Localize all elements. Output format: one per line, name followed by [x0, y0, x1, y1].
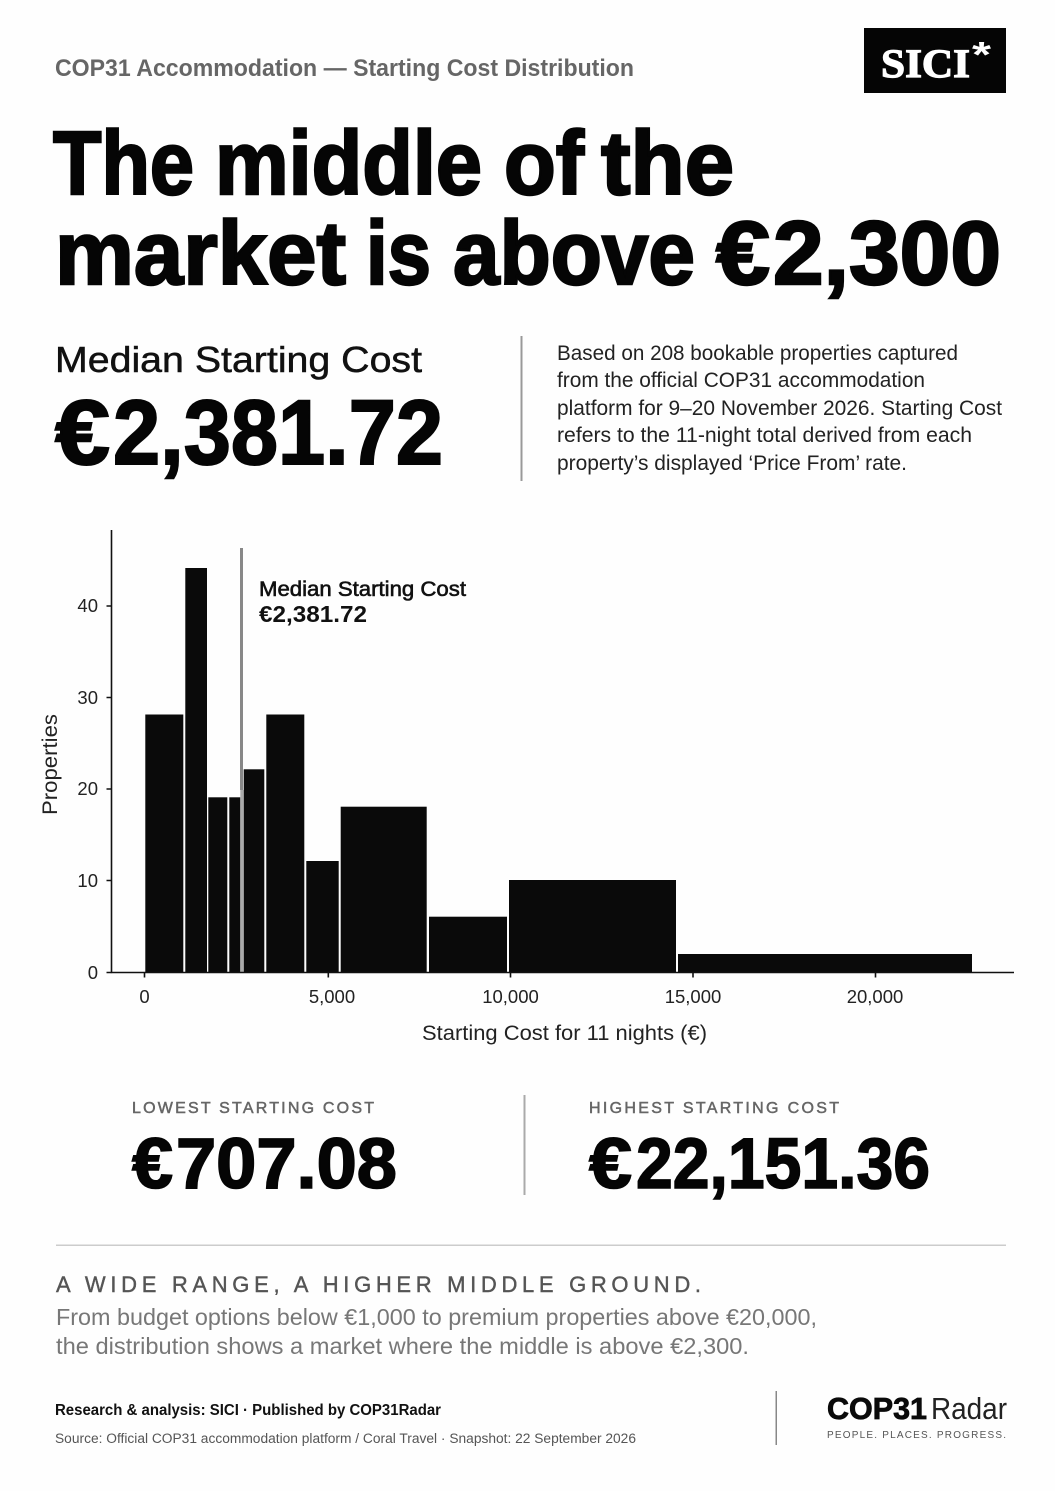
y axis tick labels: 0: [88, 962, 98, 983]
lowest starting cost stat: LOWEST STARTING COST: [132, 1100, 374, 1117]
closing statement: the distribution shows a market where the middle is above €2,300.: [56, 1333, 749, 1359]
footer credits: [55, 1402, 636, 1446]
x axis tick labels: 0: [139, 986, 150, 1007]
closing statement: From budget options below €1,000 to premium properties above €20,000,: [56, 1304, 817, 1330]
highest starting cost stat: 22,151.36: [636, 1125, 930, 1204]
lowest starting cost stat: [132, 1100, 397, 1204]
median starting cost stat: Median Starting Cost: [55, 339, 422, 380]
title: 2,300: [773, 204, 1001, 304]
highest starting cost stat: [589, 1100, 930, 1204]
title: the: [601, 114, 734, 214]
highest starting cost stat: €: [589, 1125, 632, 1204]
median starting cost stat: 2,381.72: [113, 382, 443, 484]
logo: SICI: [864, 28, 1006, 93]
lowest starting cost stat: €: [132, 1125, 173, 1204]
title: of: [504, 114, 585, 214]
closing statement: [56, 1272, 817, 1359]
title: [53, 114, 1001, 304]
x axis tick labels: [139, 986, 903, 1007]
logo: SICI: SICI: [881, 41, 970, 86]
logo: COP31 Radar: COP31: [827, 1391, 927, 1426]
median starting cost stat: [55, 339, 443, 484]
logo: SICI: *: [972, 34, 991, 75]
methodology text block: refers to the 11-night total derived from each: [557, 424, 972, 447]
y axis tick labels: 10: [77, 870, 98, 891]
methodology text block: platform for 9–20 November 2026. Starting Cost: [557, 397, 1002, 420]
header label: COP31 Accommodation — Starting Cost Distribution: [55, 55, 634, 82]
logo: COP31 Radar: Radar: [931, 1391, 1007, 1426]
title: €: [716, 204, 770, 304]
median annotation: €2,381.72: [259, 601, 367, 627]
x axis tick labels: 10,000: [482, 986, 539, 1007]
footer credits: Research & analysis: SICI · Published by COP31Radar: [55, 1402, 441, 1419]
title: market: [55, 204, 346, 304]
x axis title: Starting Cost for 11 nights (€): [422, 1022, 707, 1045]
median line: [240, 548, 243, 790]
x axis tick labels: 5,000: [309, 986, 355, 1007]
histogram bars: [145, 568, 972, 972]
x axis tick labels: 15,000: [665, 986, 721, 1007]
y axis tick labels: [77, 595, 98, 983]
y axis title: Properties: [39, 714, 62, 815]
median annotation: Median Starting Cost: [259, 578, 466, 601]
axes: [106, 530, 1014, 978]
closing statement: A WIDE RANGE, A HIGHER MIDDLE GROUND.: [56, 1272, 701, 1297]
title: above: [453, 204, 695, 304]
methodology text block: property’s displayed ‘Price From’ rate.: [557, 452, 907, 475]
highest starting cost stat: HIGHEST STARTING COST: [589, 1100, 839, 1117]
histogram chart: [39, 530, 1014, 1045]
title: is: [366, 204, 431, 304]
logo: COP31 Radar: [827, 1391, 1007, 1441]
y axis tick labels: 20: [77, 778, 98, 799]
median starting cost stat: €: [55, 382, 110, 484]
methodology text block: from the official COP31 accommodation: [557, 369, 925, 392]
lowest starting cost stat: 707.08: [176, 1125, 397, 1204]
methodology text block: [557, 342, 1002, 475]
methodology text block: Based on 208 bookable properties captured: [557, 342, 958, 365]
title: middle: [215, 114, 482, 214]
y axis tick labels: 30: [77, 687, 98, 708]
y axis tick labels: 40: [77, 595, 98, 616]
logo: COP31 Radar: PEOPLE. PLACES. PROGRESS.: [827, 1430, 1006, 1441]
footer credits: Source: Official COP31 accommodation platform / Coral Travel · Snapshot: 22 September 2026: [55, 1431, 636, 1446]
title: The: [53, 114, 194, 214]
x axis tick labels: 20,000: [847, 986, 903, 1007]
median annotation: [259, 578, 466, 627]
